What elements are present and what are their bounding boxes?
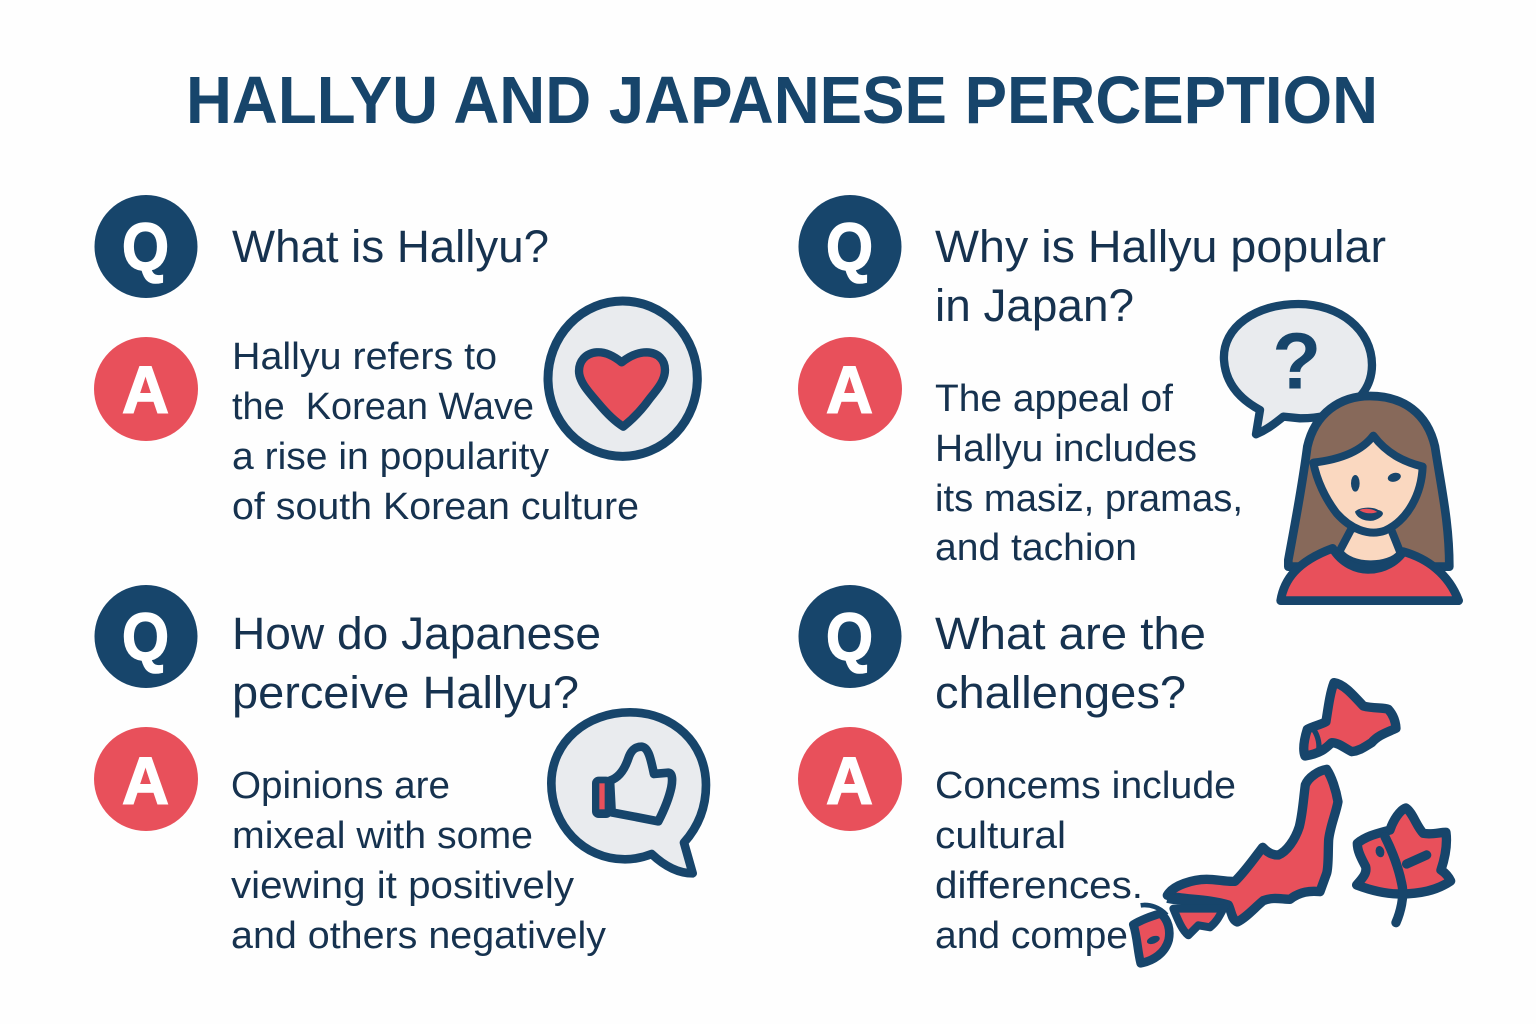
answer text: Hallyu includes [935, 428, 1197, 470]
answer text: of south Korean culture [232, 486, 639, 528]
answer text: differences. [935, 865, 1143, 907]
question heading: challenges? [935, 667, 1186, 718]
question heading: What are the [935, 608, 1206, 659]
answer text: Opinions are [231, 765, 450, 807]
thumb cuff [595, 779, 610, 815]
A badge: A [122, 744, 169, 819]
answer text [935, 378, 1243, 569]
Kyushu [1133, 913, 1169, 963]
Hokkaido [1304, 683, 1396, 756]
question heading [935, 221, 1386, 331]
answer text [231, 765, 606, 957]
Q badge [798, 195, 902, 298]
panel: what are the challenges [798, 585, 1451, 963]
answer text [935, 765, 1236, 957]
question heading: How do Japanese [232, 608, 601, 659]
answer text: the Korean Wave [232, 386, 534, 428]
question heading: perceive Hallyu? [232, 667, 579, 718]
icon: map of Japan [1133, 683, 1451, 963]
question mark: ? [1272, 317, 1321, 406]
thumb hand [610, 747, 672, 821]
icon: woman with long hair [1281, 396, 1459, 601]
answer text: and tachion [935, 527, 1137, 569]
answer text: Concems include [935, 765, 1236, 807]
Q badge [798, 585, 902, 688]
panel: why is Hallyu popular [798, 195, 1459, 601]
icon: thumbs up speech bubble [551, 712, 706, 873]
answer text: and others negatively [231, 915, 606, 957]
A badge [798, 337, 902, 441]
A badge [94, 727, 198, 831]
title: HALLYU AND JAPANESE PERCEPTION [186, 63, 1378, 138]
question heading: Why is Hallyu popular [935, 221, 1386, 272]
question heading [232, 608, 601, 718]
A badge: A [122, 353, 169, 428]
Q badge [94, 195, 198, 298]
answer text: a rise in popularity [232, 436, 549, 478]
Q badge: Q [122, 210, 169, 285]
answer text: mixeal with some [232, 815, 533, 857]
panel: how do Japanese perceive Hallyu [94, 585, 706, 957]
answer text: cultural [935, 815, 1066, 857]
channel band [1167, 898, 1229, 907]
A badge [94, 337, 198, 441]
answer text: The appeal of [935, 378, 1173, 420]
Honshu [1167, 769, 1338, 922]
question heading [935, 608, 1206, 718]
answer text: its masiz, pramas, [935, 478, 1243, 520]
Q badge: Q [122, 600, 169, 675]
panel: what is Hallyu [94, 195, 697, 528]
icon: heart in circle [548, 301, 697, 456]
Shikoku [1173, 909, 1223, 935]
A badge: A [826, 744, 873, 819]
answer text: viewing it positively [231, 865, 574, 907]
Q badge: Q [826, 600, 873, 675]
A badge [798, 727, 902, 831]
A badge: A [826, 353, 873, 428]
answer text: and compe [935, 915, 1128, 957]
answer text: Hallyu refers to [232, 336, 497, 378]
Q badge: Q [826, 210, 873, 285]
question heading: in Japan? [935, 280, 1134, 331]
question heading: What is Hallyu? [232, 221, 549, 272]
Q badge [94, 585, 198, 688]
leaf-shaped island [1357, 808, 1451, 894]
icon: question speech bubble [1224, 304, 1372, 434]
answer text [232, 336, 639, 528]
